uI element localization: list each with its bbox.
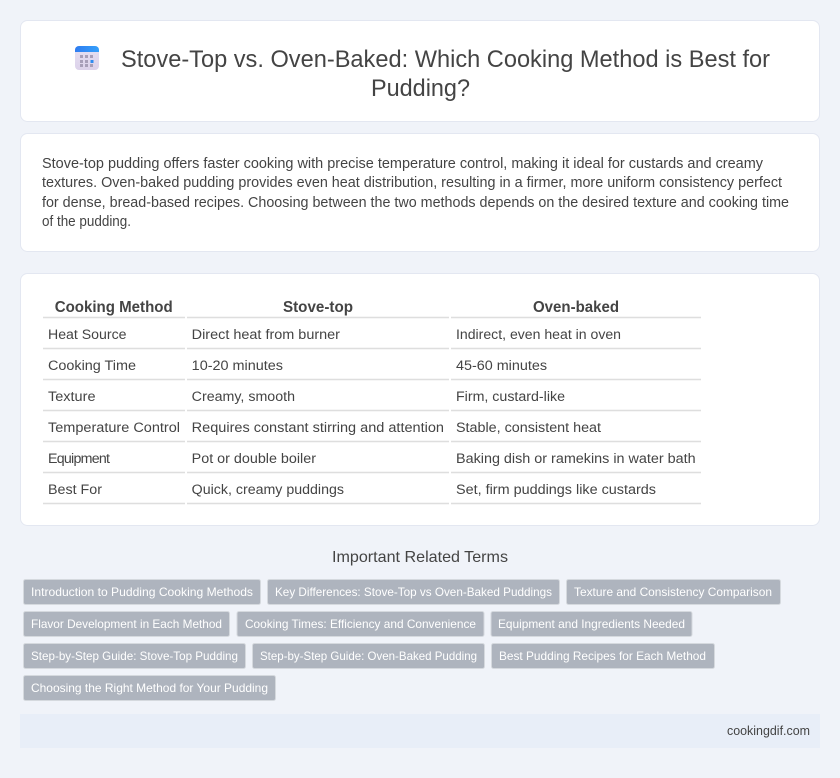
row: heat source: [48, 327, 621, 343]
tag: [237, 612, 484, 636]
tag: [252, 644, 484, 668]
row: cooking time: 45-60 minutes: [456, 358, 547, 374]
tag: [268, 580, 560, 604]
tag: Key Differences: Stove-Top vs Oven-Baked Puddings: [275, 585, 552, 599]
heading: related terms: Important Related Terms: [332, 549, 508, 566]
tag: [24, 644, 246, 668]
tag: Step-by-Step Guide: Stove-Top Pudding: [31, 649, 238, 663]
panel: intro text: Stove-top pudding offers faster cooking with precise temperature control, making it ideal for custards and creamy: [42, 156, 764, 172]
row: cooking time: 10-20 minutes: [192, 358, 283, 374]
row: equipment: Pot or double boiler: [192, 451, 316, 467]
row: texture: Firm, custard-like: [456, 389, 565, 405]
table header: [55, 299, 619, 316]
tag: Equipment and Ingredients Needed: [498, 617, 685, 631]
row: temperature control: Stable, consistent heat: [456, 420, 601, 436]
row: best for: Set, firm puddings like custards: [456, 482, 656, 498]
row: temperature control: [48, 420, 601, 436]
row: heat source: Heat Source: [48, 327, 127, 343]
table header: Cooking Method: [55, 299, 173, 316]
title: [121, 46, 770, 102]
row: best for: Quick, creamy puddings: [192, 482, 344, 498]
panel: header: [20, 20, 820, 122]
tag: [566, 580, 780, 604]
panel: intro text: textures. Oven-baked pudding provides even heat distribution, resulting in a firmer, more uniform consistency perfect: [42, 175, 782, 191]
panel: comparison table: [20, 274, 820, 526]
icon: calendar: [75, 46, 99, 70]
row: equipment: [48, 451, 696, 467]
panel: intro text: of the pudding.: [42, 214, 131, 230]
footer: cookingdif.com: [727, 723, 810, 738]
title: Stove-Top vs. Oven-Baked: Which Cooking Method is Best for: [121, 46, 770, 73]
footer: [20, 714, 820, 748]
tag: [24, 580, 260, 604]
tag: Introduction to Pudding Cooking Methods: [31, 585, 253, 599]
tag: Best Pudding Recipes for Each Method: [499, 649, 706, 663]
title: Pudding?: [371, 75, 470, 102]
row: heat source: Direct heat from burner: [192, 327, 340, 343]
panel: intro text: for dense, bread-based recipes. Choosing between the two methods depends on the desired texture and cooking time: [42, 195, 789, 211]
tag: Cooking Times: Efficiency and Convenience: [245, 617, 476, 631]
row: equipment: Equipment: [48, 451, 110, 467]
tag: [491, 612, 692, 636]
row: texture: [48, 389, 565, 405]
row: cooking time: Cooking Time: [48, 358, 136, 374]
tag: Step-by-Step Guide: Oven-Baked Pudding: [260, 649, 477, 663]
panel: intro text: [20, 134, 820, 252]
row: texture: Texture: [48, 389, 96, 405]
tag: Flavor Development in Each Method: [31, 617, 222, 631]
row: best for: Best For: [48, 482, 102, 498]
row: equipment: Baking dish or ramekins in water bath: [456, 451, 696, 467]
row: best for: [48, 482, 656, 498]
related term tags: [24, 580, 780, 700]
row: heat source: Indirect, even heat in oven: [456, 327, 621, 343]
table header: Stove-top: [283, 299, 353, 316]
row: temperature control: Temperature Control: [48, 420, 180, 436]
tag: [24, 612, 230, 636]
tag: [24, 676, 276, 700]
tag: Choosing the Right Method for Your Pudding: [31, 681, 268, 695]
table header: Oven-baked: [533, 299, 619, 316]
tag: Texture and Consistency Comparison: [574, 585, 772, 599]
row: texture: Creamy, smooth: [192, 389, 295, 405]
tag: [492, 644, 714, 668]
row: cooking time: [48, 358, 547, 374]
row: temperature control: Requires constant stirring and attention: [192, 420, 444, 436]
